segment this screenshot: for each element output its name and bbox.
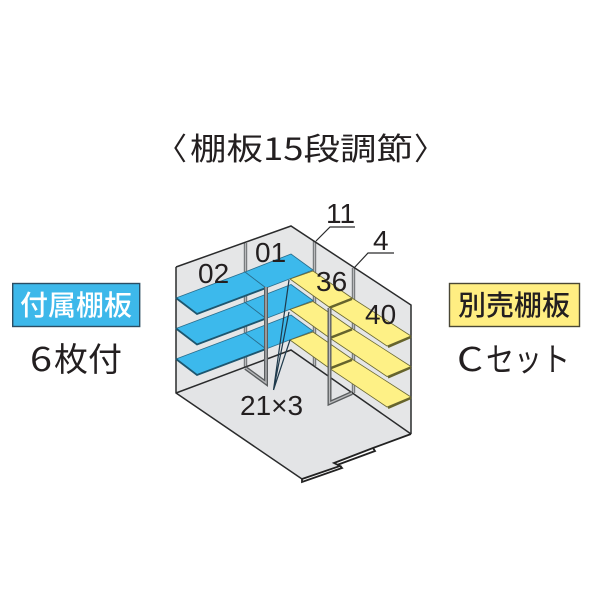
blue shelves [176,254,313,375]
left wall [176,226,291,393]
blue shelf: lower [176,315,313,375]
title: 〈 [156,124,187,169]
label: 6 pieces included: 枚付 [54,333,122,381]
label: C set: C [457,333,483,381]
label: 6 pieces included: 6 [30,333,52,381]
badge: included shelves: 付属棚板 [20,284,132,324]
leader lines: 21x3 [274,280,290,390]
yellow shelf: middle [290,302,411,378]
right wall [291,226,411,434]
part number 11: 11 [326,198,355,229]
yellow shelf: lower [290,332,411,408]
title: 〉 [414,124,445,169]
blue shelf: middle [176,284,313,344]
part number 36: 36 [316,266,347,297]
floor [176,350,411,479]
wall and floor outline [176,226,411,479]
part number 02: 02 [198,258,229,289]
wall seams [246,241,354,393]
label: C set: セット [486,333,570,381]
front post: yellow shelves [330,308,352,403]
title: 棚板15段調節 [190,124,413,169]
leader lines: 11 and 4 [316,227,394,268]
yellow shelves [290,271,411,408]
yellow shelf: upper [290,271,411,347]
front post: blue shelves [246,287,266,383]
storage unit diagram [176,198,411,482]
blue shelf: upper [176,254,313,314]
part number 21x3: 21×3 [240,390,303,421]
part number 4: 4 [373,225,389,256]
badge: sold separately shelves: 別売棚板 [458,284,570,324]
part number 40: 40 [365,299,396,330]
door threshold [302,434,411,482]
part number 01: 01 [255,237,286,268]
